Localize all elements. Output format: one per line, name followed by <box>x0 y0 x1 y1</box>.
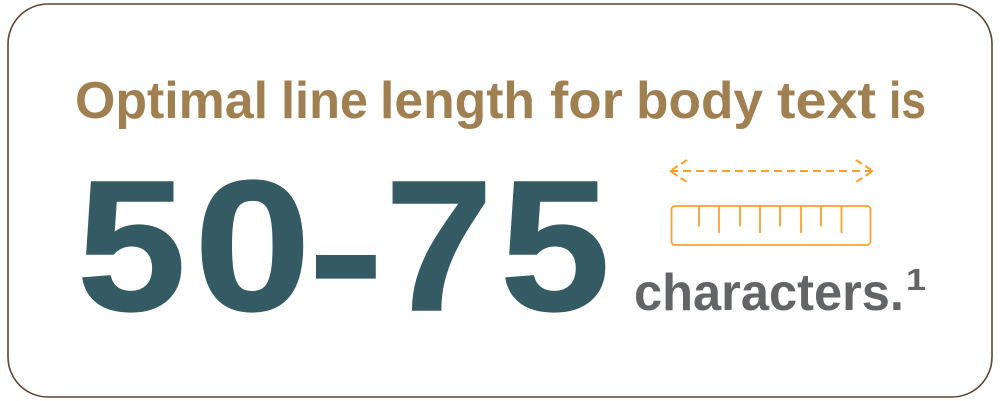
big number: 5 <box>77 143 186 350</box>
footnote marker: 1 <box>906 262 926 297</box>
heading: is <box>889 72 926 130</box>
heading: for <box>550 72 623 130</box>
big number: 7 <box>385 143 493 350</box>
heading: length <box>380 72 535 130</box>
big number: 0 <box>194 143 311 350</box>
icon: dashed double arrow <box>670 160 873 182</box>
heading: line <box>281 72 368 130</box>
heading: Optimal <box>75 72 268 130</box>
icon: ruler <box>672 206 870 245</box>
big number <box>77 143 610 355</box>
heading: text <box>777 72 876 130</box>
big number: 5 <box>500 143 610 350</box>
characters label: characters. <box>634 264 904 322</box>
heading <box>75 72 926 130</box>
big number: - <box>308 148 384 355</box>
heading: body <box>636 72 763 130</box>
